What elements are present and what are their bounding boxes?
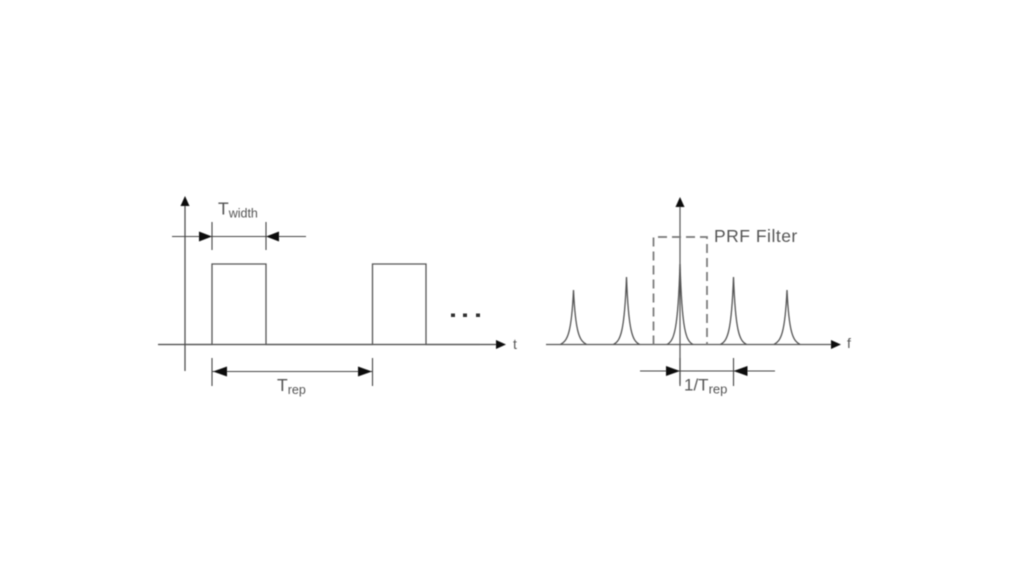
label: PRF Filter: PRF Filter xyxy=(714,226,798,246)
label: f: f xyxy=(847,335,851,351)
label: 1/Trep: 1/T xyxy=(684,376,709,394)
label: Twidth: width xyxy=(228,206,258,220)
label: 1/Trep: rep xyxy=(709,382,727,396)
frequency axes xyxy=(546,204,834,384)
Twidth dimension arrows xyxy=(172,222,306,250)
pulse waveform xyxy=(185,264,480,344)
label: Trep: T xyxy=(277,375,288,395)
panel: frequency domain spectrum xyxy=(546,197,851,396)
icon: frequency axis arrowheads xyxy=(676,197,841,349)
label: Twidth: T xyxy=(218,198,229,218)
ellipsis dots xyxy=(451,314,480,317)
PRF filter dashed outline xyxy=(654,237,707,344)
spectral peaks xyxy=(560,264,800,344)
time axes xyxy=(158,204,498,371)
label: Trep: rep xyxy=(288,383,306,397)
panel: time domain pulse train xyxy=(158,196,517,397)
Trep dimension arrow xyxy=(212,358,372,386)
1/Trep dimension arrows xyxy=(640,358,775,386)
icon: time axis arrowheads xyxy=(180,196,506,349)
label: t: t xyxy=(513,336,517,352)
